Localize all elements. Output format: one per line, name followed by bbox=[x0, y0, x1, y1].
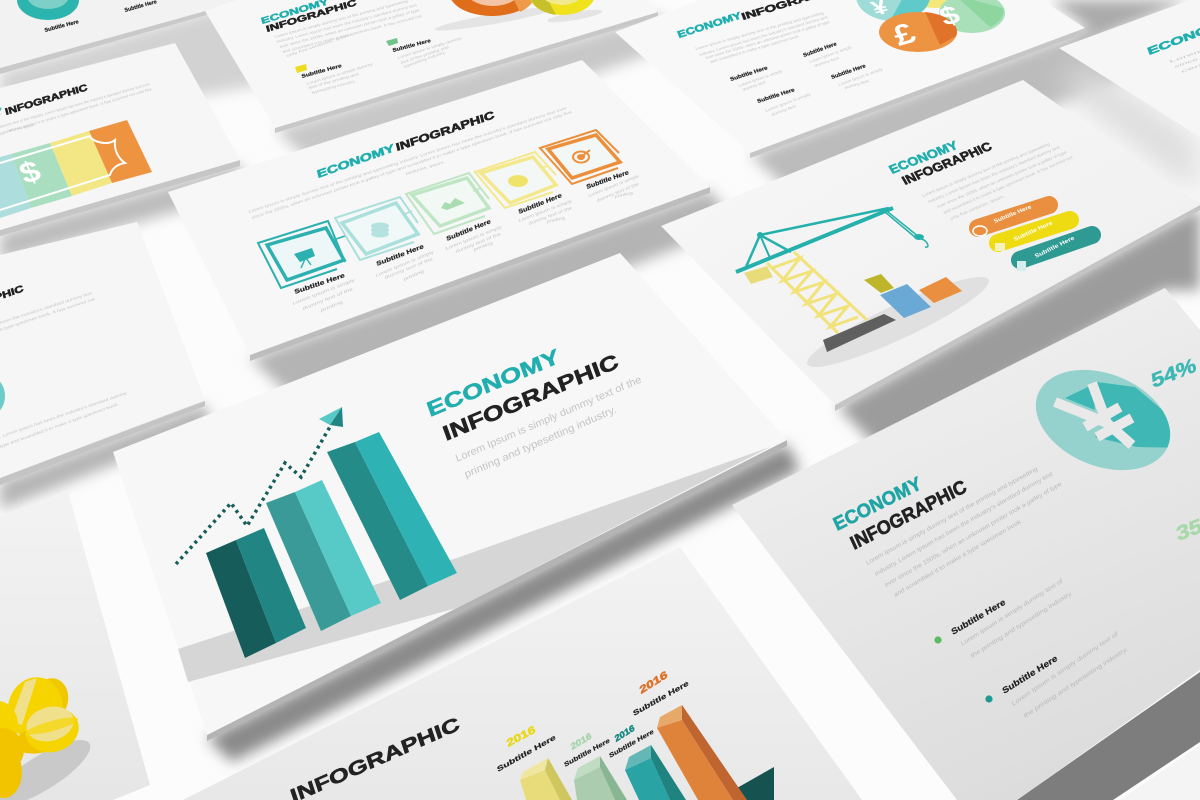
body text: and scrambled it to make a type specimen book. It has survived not bbox=[942, 155, 1074, 215]
icon: green bbox=[386, 38, 398, 46]
step 3 label: printing bbox=[473, 241, 493, 252]
step 4 label: printing bbox=[546, 216, 565, 224]
3D bar chart bbox=[520, 705, 774, 800]
step 3 label: Subtitle Here bbox=[446, 218, 492, 242]
panel: yuan slide bbox=[732, 288, 1200, 800]
icon: yellow bbox=[295, 64, 307, 73]
subtitle block 2: Lorem Ipsum is simply dummy bbox=[397, 36, 463, 60]
panel: far right slide bbox=[1059, 0, 1200, 137]
subtitle block 3: dummy text bbox=[844, 79, 870, 90]
step 1 label: Lorem Ipsum is simply bbox=[292, 278, 356, 306]
body text bbox=[248, 106, 573, 220]
subtitle block 1: Lorem Ipsum is simply bbox=[738, 69, 784, 88]
bullet: teal bbox=[985, 695, 993, 703]
step 4 label: dummy text of the bbox=[528, 206, 572, 226]
body text: centuries bbox=[1181, 52, 1200, 74]
step 5 label bbox=[586, 169, 640, 204]
stat: 54%: 54% bbox=[1149, 353, 1198, 392]
title bbox=[316, 108, 496, 180]
title bbox=[424, 344, 622, 446]
subtitle block 1 bbox=[934, 577, 1074, 660]
bar label: yellow bbox=[496, 723, 556, 774]
subtitles: Subtitle Here bbox=[44, 18, 79, 34]
body text bbox=[921, 142, 1074, 221]
step 2 label: Lorem Ipsum is simply bbox=[375, 250, 435, 278]
panel: top centre slide bbox=[205, 0, 658, 133]
subtitle block 1: Lorem Ipsum is simply dummy text of bbox=[960, 577, 1064, 648]
icon: partial teal circle bbox=[17, 0, 79, 20]
body text: dummy text of the industry. Lorem Ipsum has been the industry's standard dummy text ever bbox=[0, 82, 151, 130]
step 4 label: Subtitle Here bbox=[518, 192, 563, 216]
panel: 3D bars slide bbox=[183, 547, 862, 800]
subtitle block 1: Subtitle Here bbox=[729, 65, 769, 82]
subtitle block 2: Subtitle Here bbox=[1001, 654, 1059, 696]
subtitle block 1: Lorem Ipsum is simply dummy bbox=[306, 62, 374, 86]
body text bbox=[0, 82, 153, 136]
panel: left middle slide bbox=[0, 222, 205, 485]
yellow pill: Subtitle Here bbox=[1012, 220, 1054, 242]
subtitle block 2: Lorem Ipsum is simply bbox=[809, 45, 853, 64]
title bbox=[830, 472, 970, 554]
subtitle block 1: Subtitle Here bbox=[301, 63, 342, 79]
subtitle block 1: Subtitle Here bbox=[950, 598, 1007, 637]
subtitle block 4: dummy text bbox=[771, 104, 797, 117]
body text: Lorem Ipsum bbox=[1169, 36, 1200, 64]
panel: steps slide bbox=[168, 60, 710, 361]
title: INFOGRAPHIC bbox=[395, 108, 496, 153]
crane illustration bbox=[736, 208, 996, 380]
body text: type and scrambled it to make a type specimen book. bbox=[0, 402, 119, 450]
panel: money bill slide bbox=[0, 43, 240, 236]
bar label: orange: 2016 bbox=[638, 668, 669, 696]
step 5 label: Subtitle Here bbox=[586, 169, 630, 190]
bar chart bbox=[206, 432, 457, 658]
step 4 box bbox=[475, 152, 556, 208]
step 3 box bbox=[406, 173, 489, 234]
body text: and scrambled it to make a type specimen book. bbox=[893, 517, 1024, 599]
step 2 label: dummy text of the bbox=[384, 257, 433, 280]
icon: currency circles bbox=[856, 0, 1005, 52]
subtitle block 2: dummy text bbox=[814, 56, 840, 68]
step 2 label: Subtitle Here bbox=[376, 243, 425, 268]
bar label: teal bbox=[608, 723, 655, 760]
subtitles bbox=[44, 0, 157, 34]
subtitle block 1: the printing and typesetting industry. bbox=[970, 589, 1074, 660]
bar label: sage: 2016 bbox=[570, 731, 593, 752]
panel: main economy slide: Lorem Ipsum is simply dummy text of the bbox=[454, 373, 643, 464]
bar label: yellow: Subtitle Here bbox=[496, 733, 556, 774]
step 3 label bbox=[445, 218, 503, 254]
step 4 label bbox=[518, 192, 573, 226]
orange pill: Subtitle Here bbox=[992, 204, 1033, 224]
step 1 label: dummy text of the bbox=[302, 287, 353, 312]
body text: industry. Lorem Ipsum has been the industry's standard dummy text bbox=[927, 145, 1061, 204]
subtitle block 2 bbox=[392, 36, 463, 69]
icon: stack of discs bbox=[371, 222, 389, 238]
panel: top-left slide bbox=[0, 0, 245, 74]
bar label: yellow: 2016 bbox=[505, 723, 537, 749]
step 2 label bbox=[375, 243, 435, 282]
chart: banknote colour bands bbox=[0, 120, 152, 218]
subtitle block 1 bbox=[729, 65, 784, 92]
body text: ever since the 1500s, when an unknown printer took a galley of type bbox=[705, 20, 831, 60]
subtitle block 2: text of the printing and bbox=[400, 45, 450, 65]
bar label: teal: Subtitle Here bbox=[608, 727, 655, 760]
subtitle block 2: the printing and typesetting industry. bbox=[1023, 645, 1129, 720]
subtitles: Subtitle Here bbox=[124, 0, 157, 14]
body text bbox=[865, 465, 1063, 599]
body text: only five centuries. Ipsum. bbox=[949, 194, 1006, 221]
icon: target bbox=[573, 150, 590, 162]
title: INFOGRAPHIC bbox=[900, 140, 995, 188]
title: ECONOMY bbox=[424, 344, 563, 422]
subtitle block 4 bbox=[756, 87, 812, 117]
bar label: orange: Subtitle Here bbox=[632, 679, 690, 718]
subtitle block 1: dummy text bbox=[742, 80, 767, 92]
title: ECONOMY bbox=[830, 472, 925, 535]
icon: presentation board bbox=[294, 248, 315, 268]
icon: currency circles: $ bbox=[934, 0, 965, 32]
subtitle block 1: typesetting industry. bbox=[311, 79, 356, 95]
subtitle block 4: Subtitle Here bbox=[756, 87, 796, 104]
bar label: sage: Subtitle Here bbox=[563, 736, 611, 768]
title: INFOGRAPHIC bbox=[440, 349, 622, 446]
body text bbox=[1169, 36, 1200, 74]
panel: main economy slide bbox=[113, 253, 787, 741]
body text bbox=[695, 11, 831, 64]
title: ECONOMY bbox=[887, 139, 961, 177]
step 5 label: printing bbox=[614, 191, 633, 200]
panel: top right slide bbox=[615, 0, 1085, 158]
subtitle block 2: Subtitle Here bbox=[392, 38, 431, 53]
subtitle block 3 bbox=[830, 63, 884, 90]
icon: yuan coin bbox=[1036, 370, 1170, 470]
body text: since the 1500s bbox=[1174, 41, 1200, 69]
body text: been the industry's standard dummy text bbox=[0, 291, 93, 326]
bullet: green bbox=[934, 636, 942, 644]
teal pill: Subtitle Here bbox=[1033, 235, 1076, 259]
body text: Lorem Ipsum is simply dummy text of the printing and typesetting bbox=[921, 142, 1051, 198]
subtitle block 3: Subtitle Here bbox=[830, 63, 867, 80]
step 5 box bbox=[540, 130, 620, 184]
title: INFOGRAPHIC bbox=[265, 0, 358, 34]
yellow pill bbox=[995, 220, 1070, 251]
step 5 label: Lorem Ipsum is simply bbox=[588, 174, 640, 198]
body text: type and scrambled it to make a type specimen book. It has survived not only five bbox=[0, 87, 153, 136]
step 3 label: dummy text of the bbox=[455, 232, 501, 254]
icon: teal circle fragment bbox=[0, 378, 5, 414]
orange pill bbox=[973, 204, 1049, 236]
bar label: sage bbox=[563, 731, 611, 768]
body text bbox=[454, 373, 643, 480]
body text: printing and typesetting industry. bbox=[463, 403, 618, 480]
step 1 label: printing bbox=[320, 300, 343, 314]
subtitle block 2: Subtitle Here bbox=[802, 41, 838, 58]
title: INFOGRAPHIC bbox=[4, 82, 89, 117]
body text: a type specimen book. It has survived not bbox=[0, 297, 96, 332]
panel: crane slide bbox=[661, 80, 1200, 411]
title: ECONOMY bbox=[676, 10, 743, 40]
icon: pie chart bbox=[508, 175, 528, 187]
subtitle block 1 bbox=[301, 62, 374, 95]
subtitle block 2: Lorem Ipsum is simply dummy text of bbox=[1011, 630, 1119, 708]
bar label: teal: 2016 bbox=[614, 723, 636, 744]
body text bbox=[0, 291, 128, 450]
body text: only five centuries. Ipsum. bbox=[286, 32, 353, 58]
step 2 box bbox=[335, 197, 418, 260]
panel: bottom right slide corner bbox=[1120, 745, 1200, 800]
floor shadow band bbox=[178, 447, 770, 682]
step 4 label: Lorem Ipsum is simply bbox=[518, 199, 573, 224]
subtitle block 3: Lorem Ipsum is simply bbox=[838, 67, 884, 87]
icon: orange and yellow coins bbox=[434, 0, 603, 34]
body text: centuries. Ipsum. bbox=[405, 160, 445, 176]
step 1 label: Subtitle Here bbox=[294, 272, 346, 296]
body text: . Lorem Ipsum has been the industry's standard dummy bbox=[0, 391, 128, 440]
step 3 label: Lorem Ipsum is simply bbox=[445, 225, 503, 252]
body text: ever since the 1500s, when an unknown printer took a galley of type bbox=[936, 150, 1068, 209]
step 1 label bbox=[292, 272, 356, 314]
step 2 label: printing bbox=[403, 269, 424, 282]
icon: area chart bbox=[441, 198, 465, 210]
subtitle block 2 bbox=[985, 630, 1129, 720]
icon: currency circles: £ bbox=[887, 18, 921, 52]
body text: and scrambled it to make a type specimen book. bbox=[710, 34, 801, 64]
body text: centuries. Ipsum. bbox=[6, 123, 35, 134]
bar label: orange bbox=[632, 668, 690, 718]
step 1 box bbox=[258, 221, 345, 288]
subtitle block 4: Lorem Ipsum is simply bbox=[765, 92, 812, 113]
panel: coins slide bbox=[0, 492, 150, 800]
subtitle block 2 bbox=[802, 41, 853, 68]
title: ECONOMY bbox=[316, 141, 396, 180]
title: INFOGRAPHIC bbox=[847, 475, 970, 554]
title bbox=[676, 0, 844, 40]
title: ECONOMY bbox=[260, 0, 330, 26]
teal pill bbox=[1017, 235, 1092, 271]
subtitle block 1: text of the printing and bbox=[308, 72, 360, 90]
subtitle block 2: typesetting industry. bbox=[403, 50, 446, 69]
icon: dollar sign: $ bbox=[14, 155, 46, 190]
dotted trend arrow bbox=[176, 407, 343, 564]
body text bbox=[274, 0, 423, 58]
icon: gold coins bbox=[0, 671, 98, 800]
step 5 label: dummy text of the bbox=[596, 182, 639, 204]
